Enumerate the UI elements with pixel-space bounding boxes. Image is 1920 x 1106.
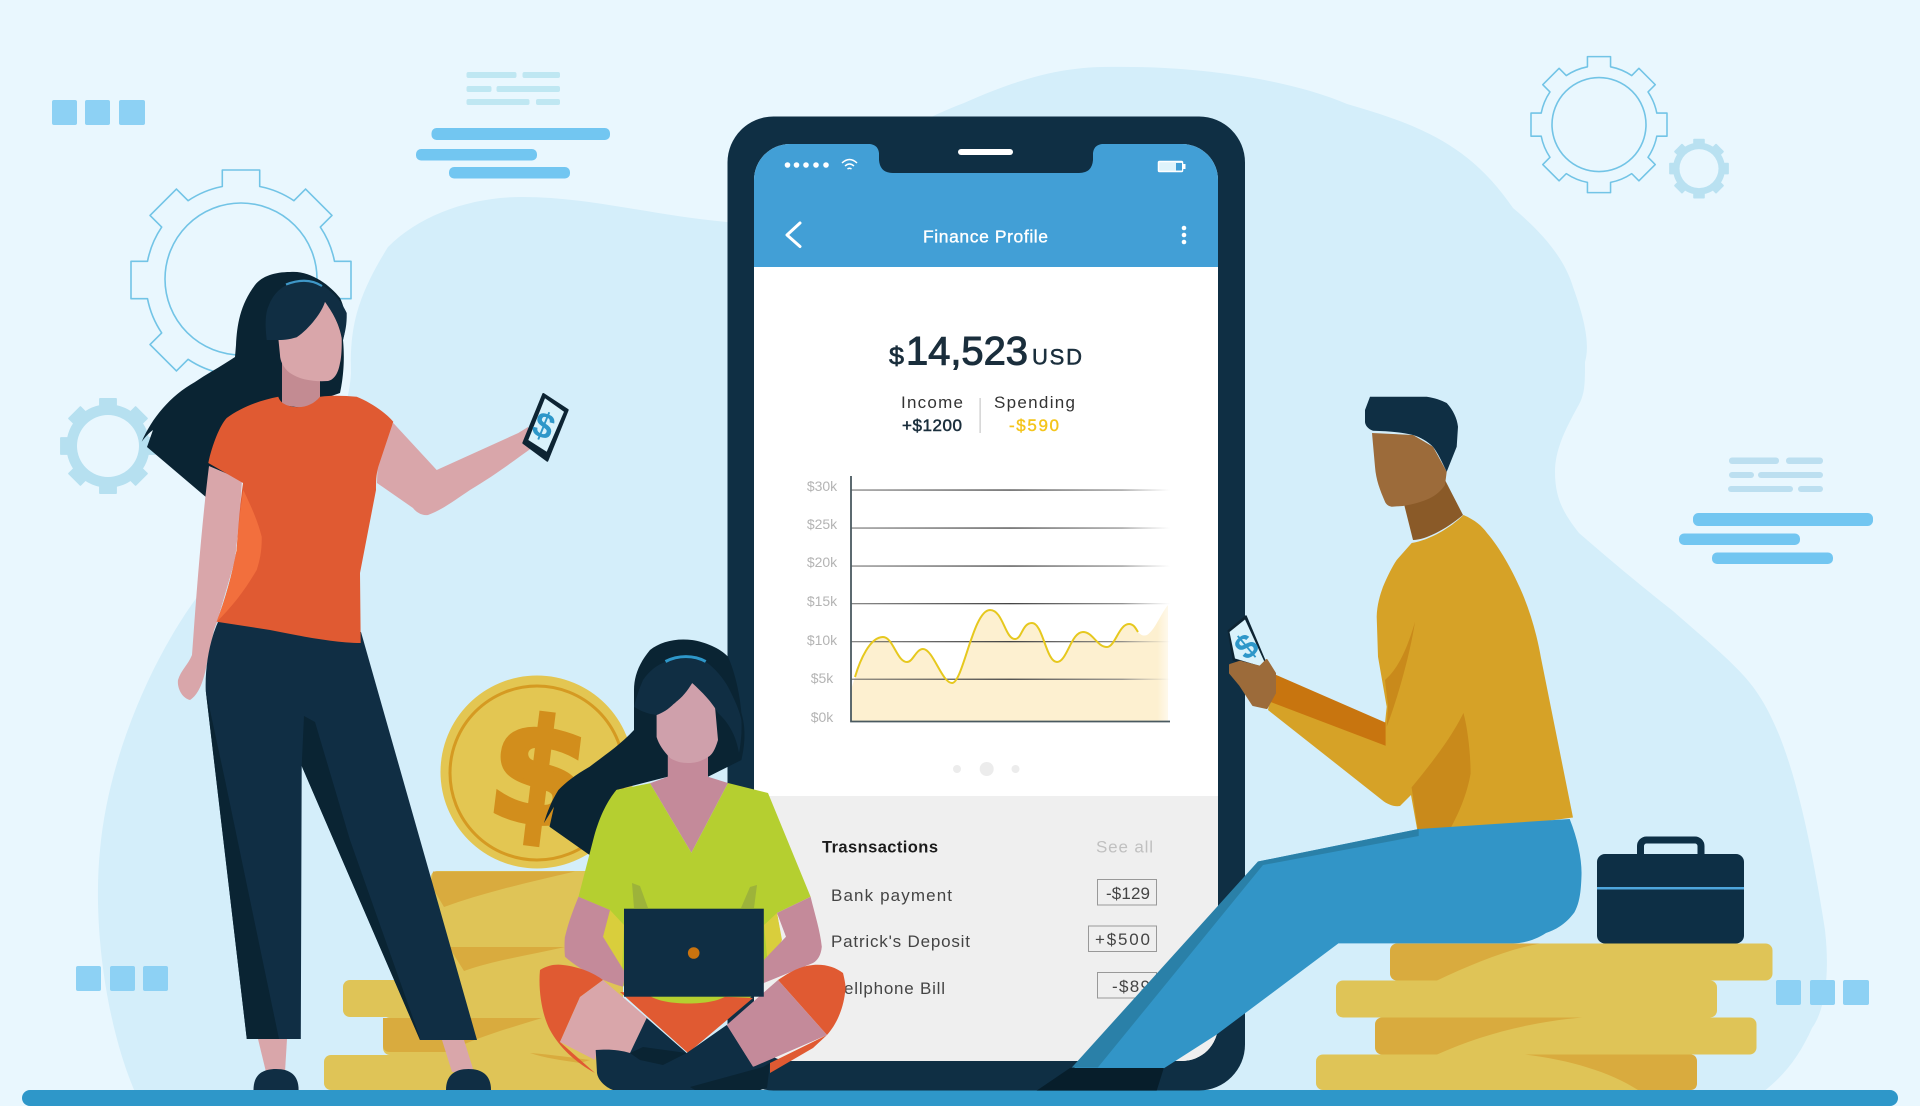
headband xyxy=(666,657,706,662)
torso shadow xyxy=(1412,713,1471,836)
phone body xyxy=(728,116,1245,1090)
row: patrick's deposit: +$500 xyxy=(1095,930,1150,949)
back hair xyxy=(142,272,345,498)
grid lines xyxy=(851,489,1170,680)
held phone: $ xyxy=(527,403,561,448)
axis labels: $20k xyxy=(807,554,838,570)
person: standing woman xyxy=(142,272,568,1090)
raised arm xyxy=(377,423,533,515)
neck xyxy=(282,350,338,410)
thigh left xyxy=(560,980,647,1060)
income: +$1200 xyxy=(902,416,962,435)
balance: $ xyxy=(889,342,904,370)
row: patrick's deposit: Patrick's Deposit xyxy=(831,932,970,951)
area chart xyxy=(807,476,1170,725)
left coin stack xyxy=(324,871,664,1090)
text lines: right xyxy=(1679,458,1873,564)
row: patrick's deposit xyxy=(831,926,1156,952)
front hair xyxy=(266,281,347,340)
person: seated man xyxy=(1037,397,1582,1091)
man's neck xyxy=(1403,480,1463,540)
thigh right xyxy=(727,980,827,1067)
face xyxy=(657,683,718,763)
laptop xyxy=(624,909,764,997)
axis labels: $30k xyxy=(807,478,838,494)
gear: small right filled xyxy=(1670,140,1728,198)
screen title: Finance Profile xyxy=(923,226,1048,246)
t-shirt xyxy=(208,396,393,643)
arm: left xyxy=(565,897,625,987)
row: bank payment: -$129 xyxy=(1106,884,1150,903)
see all: See all xyxy=(1096,838,1153,856)
right shoe xyxy=(442,1040,491,1090)
shirt highlight xyxy=(217,490,262,622)
man's face xyxy=(1372,433,1447,507)
signal dots xyxy=(785,162,829,168)
axis labels: $5k xyxy=(811,670,834,686)
balance: USD xyxy=(1032,344,1082,370)
crossed shins xyxy=(596,1018,770,1090)
held phone xyxy=(523,394,568,461)
wifi icon xyxy=(842,160,857,169)
man's hand xyxy=(1230,660,1275,708)
pagination dots xyxy=(953,762,1020,776)
man's sweater xyxy=(1268,515,1573,838)
transactions heading: Trasnsactions xyxy=(822,838,938,856)
man's phone: $ xyxy=(1227,626,1266,668)
chart area fill xyxy=(851,605,1168,721)
right coin stack xyxy=(1316,944,1772,1090)
income line xyxy=(855,610,1138,683)
spending: Spending xyxy=(994,393,1075,412)
squares: bottom right xyxy=(1776,980,1869,1005)
arm: right xyxy=(764,897,822,983)
divider xyxy=(980,398,981,433)
row: cellphone bill: -$89 xyxy=(1112,977,1150,996)
gear: large left outline xyxy=(131,170,351,390)
dollar coin: $ xyxy=(480,684,600,862)
front hair xyxy=(634,659,742,753)
income xyxy=(901,393,963,435)
trousers shadow xyxy=(1072,829,1419,1068)
row: cellphone bill xyxy=(831,972,1156,998)
briefcase xyxy=(1597,840,1744,944)
trousers xyxy=(206,612,477,1040)
notch xyxy=(870,140,1102,173)
phone mockup xyxy=(728,116,1245,1090)
person: seated woman with laptop xyxy=(539,639,846,1090)
row: bank payment xyxy=(831,880,1156,905)
gear: small left filled xyxy=(61,399,155,493)
transactions panel xyxy=(754,796,1218,1061)
balance xyxy=(889,330,1082,374)
inner sleeve xyxy=(1268,674,1386,746)
face xyxy=(278,302,342,381)
green hem under laptop xyxy=(650,996,726,1004)
row: bank payment: Bank payment xyxy=(831,886,952,905)
axis labels: $25k xyxy=(807,516,838,532)
speaker xyxy=(958,149,1013,155)
sleeve shadows xyxy=(632,883,757,908)
shorts right xyxy=(770,965,846,1073)
hanging arm xyxy=(178,466,242,700)
income: Income xyxy=(901,393,963,412)
gear: large right outline xyxy=(1531,57,1667,193)
squares: bottom left xyxy=(76,966,168,991)
back arrow xyxy=(787,223,800,246)
shorts left xyxy=(539,965,603,1073)
axis labels: $0k xyxy=(811,709,834,725)
dollar coin xyxy=(440,676,634,868)
shorts centre xyxy=(620,992,753,1053)
axis labels: $15k xyxy=(807,593,838,609)
spending: -$590 xyxy=(1009,416,1059,435)
axis labels: $10k xyxy=(807,632,838,648)
spending xyxy=(994,393,1075,435)
app header xyxy=(754,144,1218,267)
row: cellphone bill: Cellphone Bill xyxy=(831,979,945,998)
squares: top left xyxy=(52,100,145,125)
trousers shadow strips xyxy=(206,690,420,1040)
left shoe xyxy=(254,1039,299,1090)
chart axes xyxy=(851,476,1170,722)
sleeve shadow xyxy=(1385,622,1415,727)
back hair xyxy=(544,639,744,855)
ground bar xyxy=(22,1090,1898,1106)
menu dots xyxy=(1182,226,1186,244)
axis labels xyxy=(807,478,838,725)
text lines: top left xyxy=(416,72,610,178)
man's shoe xyxy=(1037,1068,1164,1091)
man's hair xyxy=(1365,397,1458,472)
headband xyxy=(286,281,322,286)
neck and chest xyxy=(650,750,728,853)
battery icon xyxy=(1158,162,1186,172)
man's trousers xyxy=(1074,819,1582,1068)
green top xyxy=(578,783,811,1005)
balance: 14,523 xyxy=(906,330,1028,374)
shin shadow xyxy=(630,1047,770,1090)
shirt hem yellow xyxy=(603,910,782,972)
phone screen xyxy=(754,144,1218,1061)
